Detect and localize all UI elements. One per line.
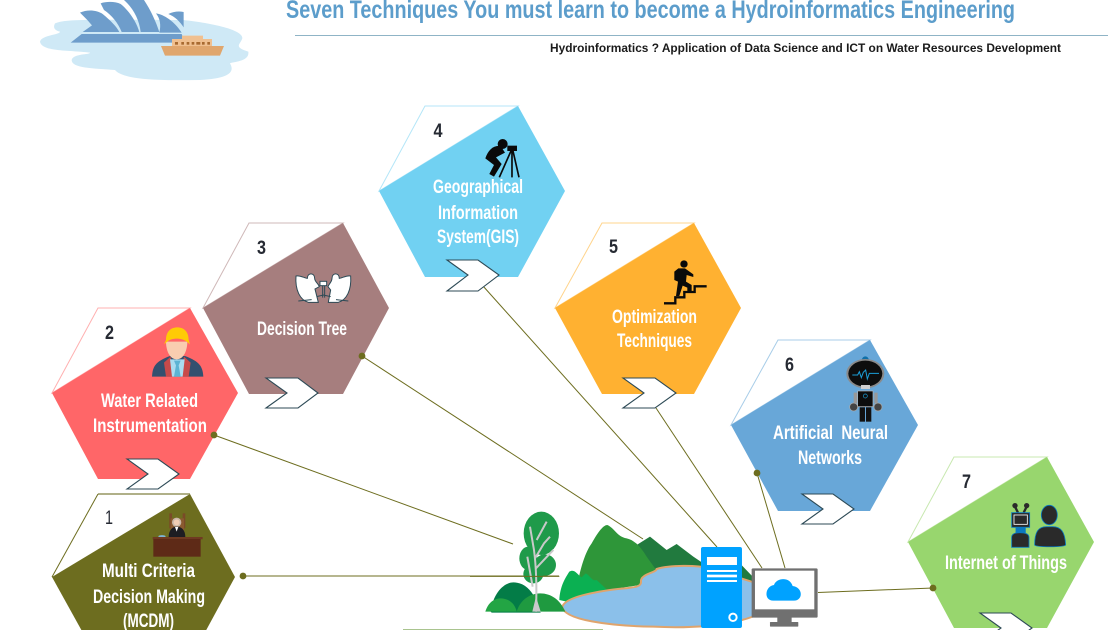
label: Geographical Information System: Information: [438, 202, 518, 224]
label: Water Related Instrumentation: Instrumentation: [93, 415, 207, 437]
hexagon shape 3: [203, 223, 389, 394]
icon: surveyor with tripod: [485, 139, 519, 177]
connector end dots: [211, 353, 936, 591]
hexagon shape 4: [379, 106, 565, 277]
label: Optimization Techniques: [612, 306, 697, 352]
label: Geographical Information System: [433, 176, 523, 248]
number 2: 2: [105, 323, 114, 344]
label: Artificial Neural Networks: [773, 422, 888, 469]
icon: engineer with helmet: [152, 327, 203, 377]
label: Optimization Techniques: Techniques: [617, 330, 692, 352]
icon: two people in chairs: [296, 274, 351, 302]
number 3: 3: [257, 238, 266, 259]
label: Multi Criteria Decision Making: Multi Criteria: [102, 560, 195, 582]
label: Internet of Things: Internet of Things: [945, 552, 1067, 574]
label: Optimization Techniques: Optimization: [612, 306, 697, 328]
hexagon shape 5: [555, 223, 741, 394]
panel: hexagon 1 MCDM: [52, 494, 235, 630]
label: Decision Tree: Decision Tree: [257, 318, 347, 340]
icon: robot: [846, 356, 884, 422]
hexagon shape 7: [908, 457, 1094, 628]
hexagon shape 2: [52, 308, 238, 479]
front mountain: [577, 525, 657, 595]
number 7: 7: [962, 472, 971, 493]
label: Geographical Information System: Geographical: [433, 176, 523, 198]
number 1: 1: [105, 508, 113, 529]
arrow 4: [447, 260, 499, 291]
label: Water Related Instrumentation: Water Related: [101, 390, 198, 412]
panel: hexagon 2 Instrumentation: [52, 308, 238, 489]
tree: [519, 512, 559, 612]
small hill: [559, 571, 607, 602]
arrow 3: [266, 378, 318, 408]
number 4: 4: [434, 121, 443, 142]
icon: judge at desk: [153, 513, 203, 557]
panel: hexagon 6 Neural Networks: [731, 340, 918, 524]
arrow 2: [127, 459, 179, 489]
label: Artificial Neural Networks: Networks: [798, 447, 862, 469]
subtitle: Hydroinformatics ? Application of Data Science and ICT on Water Resources Development: [550, 41, 1061, 55]
landscape: tree, mountains, lake: [470, 512, 757, 627]
label: Multi Criteria Decision Making: Decision Making: [93, 586, 205, 608]
panel: hexagon 3 Decision Tree: [203, 223, 389, 408]
icon: monitor with cloud: [752, 568, 818, 627]
connector lines: [214, 286, 933, 592]
icon: robot and user: [1012, 503, 1066, 547]
arrow 5: [623, 378, 676, 408]
arrow 7: [980, 613, 1032, 630]
panel: hexagon 4 GIS: [379, 106, 565, 291]
icon: Sydney opera house and ship: [40, 0, 248, 80]
label: Artificial Neural Networks: Artificial Neural: [773, 422, 888, 444]
icon: person climbing stairs: [664, 260, 707, 303]
label: Multi Criteria Decision Making: [93, 560, 205, 630]
panel: hexagon 7 Internet of Things: [908, 457, 1094, 630]
panel: hexagon 5 Optimization: [555, 223, 741, 408]
hexagon shape 6: [731, 340, 918, 511]
arrow 6: [802, 494, 854, 524]
bottom rule: [403, 628, 603, 630]
lake: [562, 566, 757, 627]
number 6: 6: [785, 355, 794, 376]
hexagon shape 1: [52, 494, 235, 630]
tree cross line: [470, 575, 559, 578]
icon: server tower: [701, 547, 742, 628]
bushes: [485, 582, 565, 613]
number 5: 5: [609, 237, 618, 258]
label: Geographical Information System: System(GIS): [437, 226, 519, 248]
label: Water Related Instrumentation: [93, 390, 207, 437]
back mountain: [637, 537, 753, 600]
